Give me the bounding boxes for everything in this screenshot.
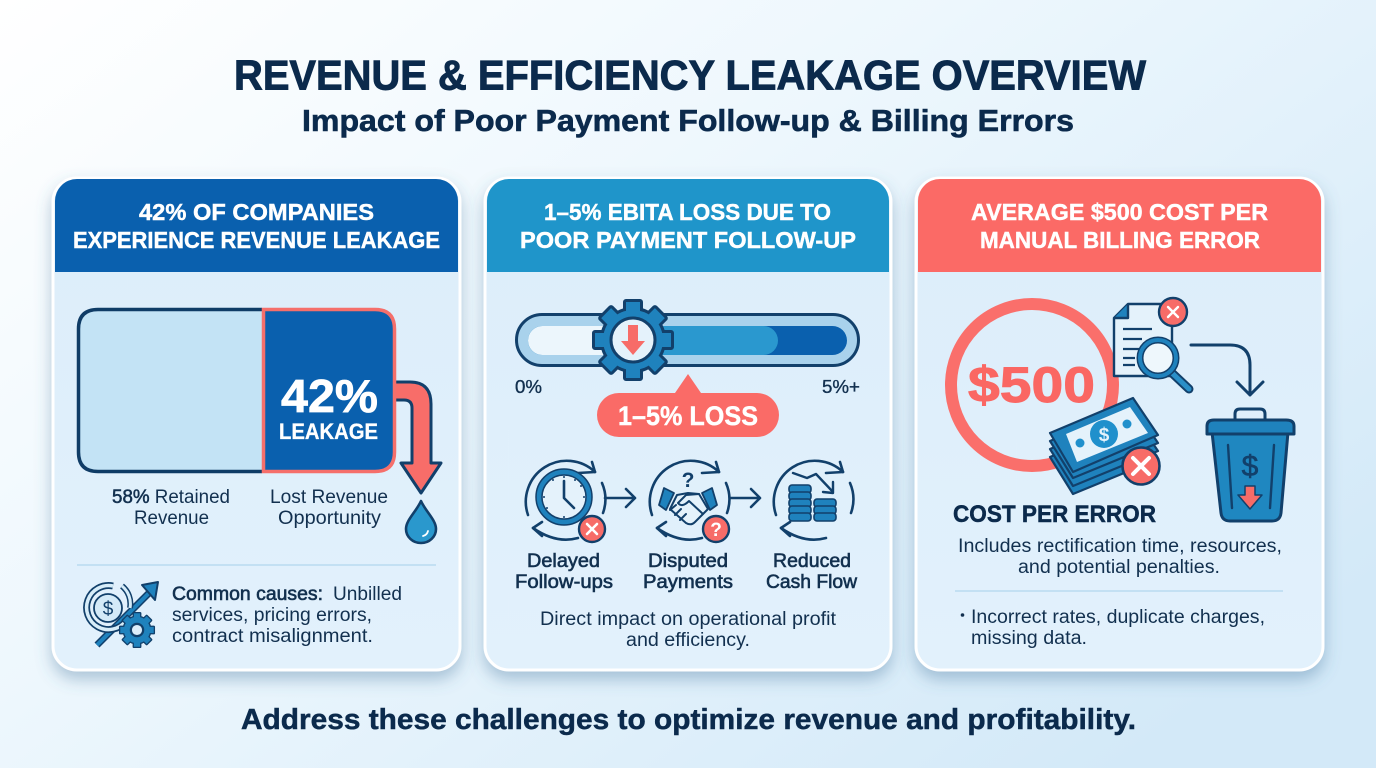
icon: water drop	[406, 501, 436, 543]
icon: document and magnifier	[1114, 298, 1189, 389]
lost revenue label	[270, 487, 388, 529]
card heading: 1–5% EBITA LOSS DUE TO	[544, 199, 831, 225]
icon: gear with down arrow	[595, 302, 671, 378]
label: disputed payments	[643, 551, 733, 593]
loss callout: 1–5% LOSS	[618, 401, 758, 431]
panel: EBITA loss	[485, 178, 891, 670]
icon: delayed follow-ups	[526, 461, 605, 542]
subtitle: Impact of Poor Payment Follow-up & Billing Errors	[302, 103, 1074, 138]
common causes text: services, pricing errors,	[172, 605, 372, 626]
card heading: 42% OF COMPANIES	[139, 199, 374, 225]
icon: revenue causes: $	[103, 599, 114, 620]
card heading: AVERAGE $500 COST PER	[971, 199, 1268, 225]
scale labels: 5%+	[822, 377, 860, 397]
card background	[53, 178, 460, 670]
icon: cash stack: $	[1099, 425, 1110, 446]
retained label	[112, 487, 230, 529]
label: reduced cash flow: Reduced	[773, 551, 851, 572]
common causes text	[172, 584, 402, 647]
label: reduced cash flow: Cash Flow	[766, 572, 857, 593]
common causes text: Unbilled	[333, 584, 402, 605]
icon: disputed payments: ?	[682, 469, 694, 492]
stacked revenue bar: 42%	[281, 370, 378, 422]
impact text: Direct impact on operational profit	[540, 609, 837, 630]
retained label: Revenue	[134, 508, 209, 529]
error types bullet	[961, 607, 1265, 649]
card heading	[73, 199, 440, 253]
card background	[485, 178, 891, 670]
loss callout	[597, 374, 779, 437]
error types bullet: missing data.	[971, 628, 1087, 649]
scale labels	[515, 377, 860, 397]
cost description: and potential penalties.	[1018, 557, 1220, 578]
icon: disputed payments: ?	[710, 520, 722, 541]
label: disputed payments: Payments	[643, 572, 733, 593]
lost revenue label: Lost Revenue	[270, 487, 388, 508]
icon: trash bin	[1207, 409, 1294, 521]
card header	[487, 179, 889, 272]
icon: cash stack	[1050, 398, 1160, 494]
arrow	[730, 489, 760, 507]
gauge bar	[516, 314, 858, 366]
$500 ring	[951, 304, 1113, 466]
$500 ring: $500	[968, 357, 1095, 413]
label: reduced cash flow	[766, 551, 857, 593]
panel: revenue leakage	[53, 178, 460, 670]
card header	[55, 179, 458, 272]
icon: disputed payments	[650, 461, 729, 542]
error types bullet: Incorrect rates, duplicate charges,	[971, 607, 1265, 628]
label: disputed payments: Disputed	[648, 551, 728, 572]
card heading: POOR PAYMENT FOLLOW-UP	[520, 227, 856, 253]
title: REVENUE & EFFICIENCY LEAKAGE OVERVIEW	[234, 52, 1146, 98]
card heading: EXPERIENCE REVENUE LEAKAGE	[73, 227, 440, 253]
icon: trash bin: $	[1242, 450, 1259, 483]
icon: revenue causes	[87, 582, 158, 647]
arrow	[1191, 345, 1263, 395]
label: delayed follow-ups: Follow-ups	[515, 572, 613, 593]
cost per error label: COST PER ERROR	[953, 501, 1156, 528]
cost description	[958, 536, 1282, 578]
card background	[916, 178, 1323, 670]
leakage arrow	[394, 382, 441, 493]
footer message: Address these challenges to optimize revenue and profitability.	[241, 704, 1136, 736]
retained label: 58% Retained	[112, 487, 230, 508]
impact text	[540, 609, 837, 651]
lost revenue label: Opportunity	[278, 508, 382, 529]
arrow	[605, 489, 635, 507]
label: delayed follow-ups	[515, 551, 613, 593]
scale labels: 0%	[515, 377, 542, 397]
card heading	[520, 199, 856, 253]
stacked revenue bar: LEAKAGE	[279, 419, 378, 444]
stacked revenue bar	[78, 310, 394, 472]
label: delayed follow-ups: Delayed	[527, 551, 600, 572]
card header	[918, 179, 1321, 272]
panel: billing error cost	[916, 178, 1323, 670]
card heading	[971, 199, 1268, 253]
common causes text: Common causes:	[172, 584, 323, 605]
cost description: Includes rectification time, resources,	[958, 536, 1282, 557]
impact text: and efficiency.	[626, 630, 750, 651]
icon: reduced cash flow	[774, 461, 853, 540]
card heading: MANUAL BILLING ERROR	[980, 227, 1260, 253]
common causes text: contract misalignment.	[172, 626, 373, 647]
